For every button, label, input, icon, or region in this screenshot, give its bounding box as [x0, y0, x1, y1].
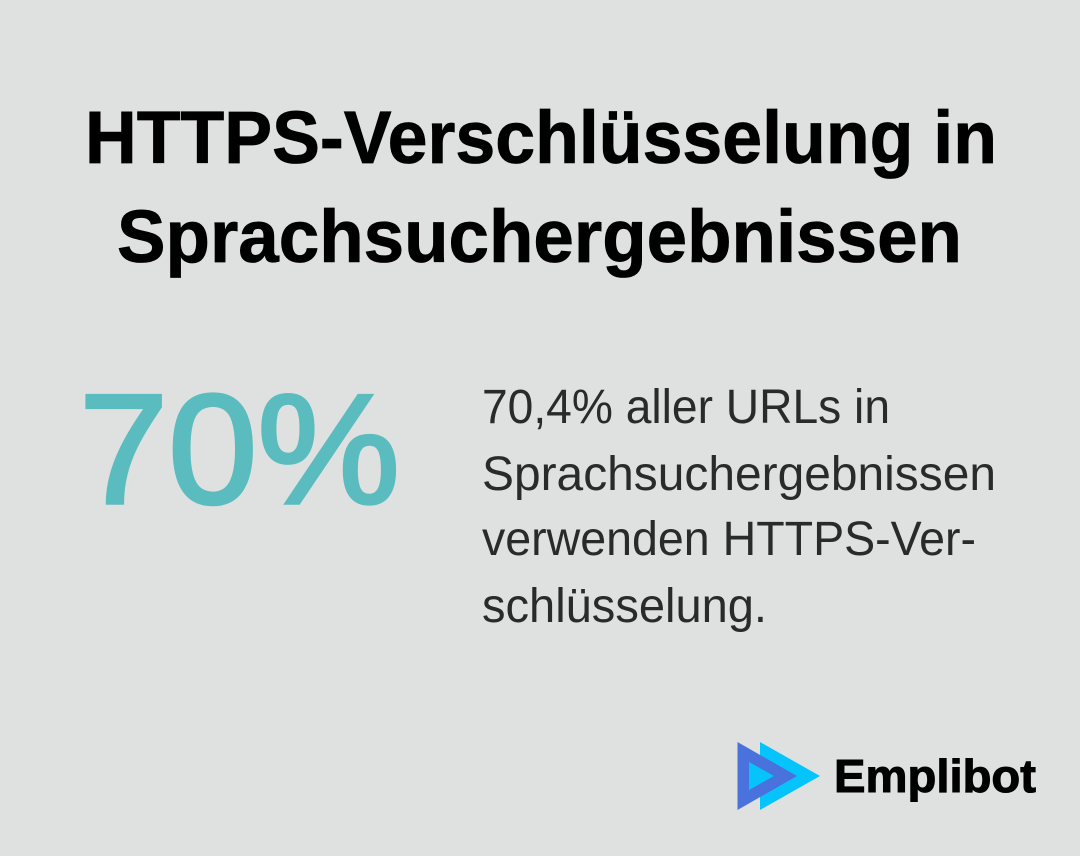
title: HTTPS-Verschlüsselung in — [85, 96, 997, 179]
icon: play triangles — [738, 742, 820, 810]
title — [85, 96, 997, 278]
statistic description: schlüsselung. — [482, 580, 767, 633]
logo wordmark: Emplibot — [834, 750, 1036, 802]
statistic description: verwenden HTTPS-Ver- — [482, 513, 976, 566]
statistic description: Sprachsuchergebnissen — [482, 448, 996, 501]
logo: Emplibot — [738, 742, 1036, 810]
statistic description — [482, 381, 996, 633]
statistic description: 70,4% aller URLs in — [482, 381, 890, 434]
big statistic: 70%: 70% — [79, 363, 400, 537]
title: Sprachsuchergebnissen — [117, 195, 962, 278]
